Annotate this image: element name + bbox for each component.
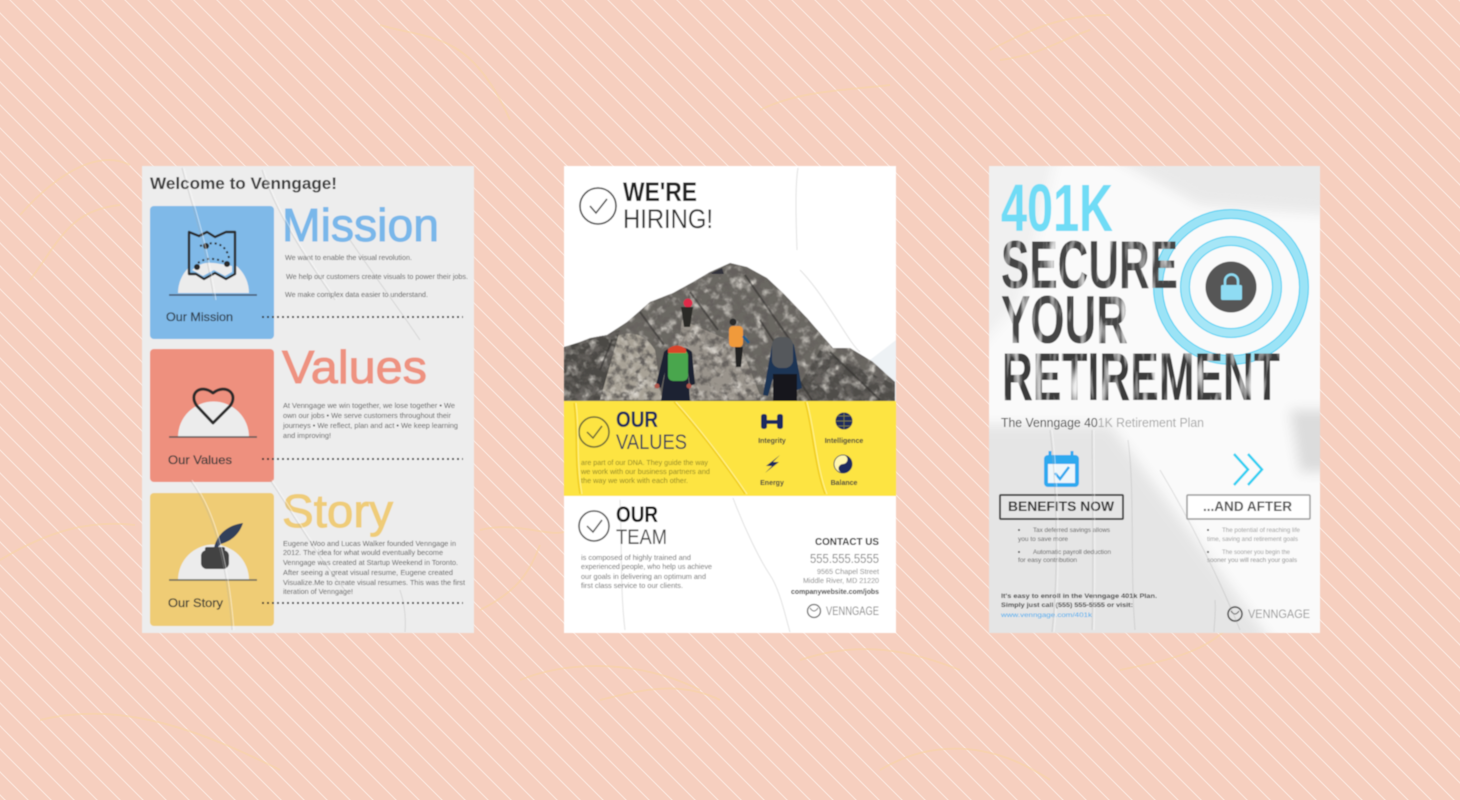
poster: 401K Secure Your Retirement [988, 166, 1320, 634]
label: our story: Our Story [168, 596, 223, 610]
icon: check circle values [579, 417, 609, 447]
icon: calendar check [1044, 451, 1079, 487]
climber: grey backpack [763, 337, 802, 401]
text: mission body: We make complex data easier to understand. [285, 292, 428, 299]
text: story body: iteration of Venngage! [283, 589, 353, 596]
text: enroll footer: www.venngage.com/401k [1000, 612, 1093, 619]
heading: 401K: 401K [1001, 171, 1113, 246]
icon: check circle hiring [580, 188, 616, 224]
text: team paragraph: first class service to our clients. [581, 583, 683, 590]
heading: our values: OUR [616, 407, 658, 432]
text: story body: Venngage was created at Startup Weekend in Toronto. [283, 560, 458, 567]
box: and after: ...AND AFTER [1203, 499, 1292, 514]
heading: our team: TEAM [616, 526, 667, 549]
heading: secure your retirement [1001, 227, 1280, 415]
text: contact us: Middle River, MD 21220 [803, 578, 879, 585]
heading: secure your retirement: RETIREMENT [1002, 339, 1280, 415]
text: story body [283, 541, 465, 596]
text: team paragraph: our goals in delivering an optimum and [581, 574, 706, 581]
icon: balance yin yang [834, 455, 852, 473]
text: after list: The potential of reaching life [1222, 527, 1300, 534]
text: contact us: 9565 Chapel Street [817, 569, 879, 576]
heading: mission: Mission [282, 199, 439, 251]
panel: our values band [564, 401, 896, 496]
heading: our values [616, 407, 687, 454]
icon: target rings with lock [1154, 210, 1308, 364]
text: enroll footer: It's easy to enroll in the Venngage 401k Plan. [1001, 593, 1157, 600]
text: benefits list [1018, 527, 1111, 564]
text: values paragraph: we work with our business partners and [580, 469, 710, 476]
text: mission body: We want to enable the visual revolution. [285, 255, 412, 262]
climber: green backpack [654, 346, 695, 401]
text: team paragraph: is composed of highly trained and [581, 555, 691, 562]
icon: map on dome [169, 232, 257, 295]
heading: secure your retirement: YOUR [1001, 282, 1128, 358]
text: benefits list: Tax deferred savings allows [1033, 527, 1111, 534]
text: values paragraph: the way we work with each other. [581, 478, 688, 485]
text: contact us: companywebsite.com/jobs [791, 587, 879, 596]
panel: mission [150, 199, 468, 339]
panel: and after [1187, 495, 1310, 564]
text: values body [282, 403, 458, 440]
text: values body: At Venngage we win together, we lose together • We [283, 403, 455, 410]
text: contact us: CONTACT US [815, 537, 879, 548]
text: values body: journeys • We reflect, plan and act • We keep learning [282, 423, 458, 430]
panel: values [150, 341, 463, 482]
text: benefits list: Automatic payroll deduction [1033, 549, 1111, 556]
climber: red helmet [681, 298, 693, 327]
label: our values: Our Values [168, 453, 232, 467]
climber: orange backpack [729, 318, 749, 367]
text: enroll footer [1000, 593, 1157, 619]
text: story body: 2012. The idea for what would eventually become [283, 550, 443, 557]
label: integrity: Integrity [758, 438, 786, 445]
heading: secure your retirement: SECURE [1001, 227, 1178, 303]
poster title: Welcome to Venngage! [150, 174, 337, 193]
logo: venngage: VENNGAGE [826, 606, 879, 618]
heading: values: Values [282, 341, 427, 393]
text: values paragraph [580, 460, 710, 485]
icon: check circle team [579, 511, 609, 541]
panel: our team [579, 498, 879, 632]
text: benefits list: you to save more [1018, 536, 1068, 543]
logo: venngage: VENNGAGE [1248, 607, 1310, 621]
box: benefits now: BENEFITS NOW [1008, 499, 1114, 514]
poster: We're Hiring [564, 166, 896, 633]
text: story body: After seeing a great visual resume, Eugene created [283, 570, 453, 577]
logo: venngage [808, 604, 879, 618]
text: after list: The sooner you begin the [1222, 549, 1290, 556]
icon: ink pot and feather [169, 523, 257, 580]
text: values body: own our jobs • We serve customers throughout their [283, 413, 452, 420]
icon: heart on dome [169, 389, 257, 437]
label: energy: Energy [760, 480, 784, 487]
panel: story [150, 485, 465, 626]
text: team paragraph [581, 555, 712, 590]
label: our mission: Our Mission [166, 310, 233, 324]
text: mission body: We help our customers create visuals to power their jobs. [286, 274, 468, 281]
poster: Welcome to Venngage [142, 166, 474, 633]
icon: integrity dumbbell [761, 414, 783, 429]
text: after list: time, saving and retirement goals [1207, 536, 1299, 543]
text: story body: Eugene Woo and Lucas Walker founded Venngage in [283, 541, 456, 548]
label: balance: Balance [831, 480, 858, 487]
text: enroll footer: Simply just call (555) 555-5555 or visit: [1001, 602, 1133, 609]
panel: benefits now [1000, 495, 1123, 564]
heading: we're hiring [623, 177, 713, 234]
text: contact us [791, 537, 879, 596]
subtitle: The Venngage 401K Retirement Plan [1001, 415, 1204, 430]
icon: energy bolt [765, 455, 780, 473]
heading: our team [616, 502, 667, 549]
text: mission body [285, 255, 468, 299]
heading: story: Story [282, 485, 393, 537]
icon: double chevron arrow [1234, 454, 1262, 485]
label: intelligence: Intelligence [825, 438, 863, 445]
heading: our values: VALUES [616, 431, 687, 454]
heading: we're hiring: WE'RE [623, 177, 697, 207]
text: after list: sooner you will reach your goals [1207, 557, 1298, 564]
text: team paragraph: experienced people, who help us achieve [581, 564, 712, 571]
climber: summit [711, 268, 724, 274]
text: story body: Visualize.Me to create visual resumes. This was the first [283, 580, 465, 587]
heading: our team: OUR [616, 502, 658, 527]
text: after list [1207, 527, 1300, 564]
text: benefits list: for easy contribution [1018, 557, 1077, 564]
text: values body: and improving! [283, 433, 331, 440]
photo: mountain with climbers [564, 260, 896, 401]
text: contact us: 555.555.5555 [810, 551, 879, 566]
heading: we're hiring: HIRING! [623, 204, 713, 234]
text: values paragraph: are part of our DNA. They guide the way [581, 460, 708, 467]
icon: intelligence globe [836, 412, 852, 430]
